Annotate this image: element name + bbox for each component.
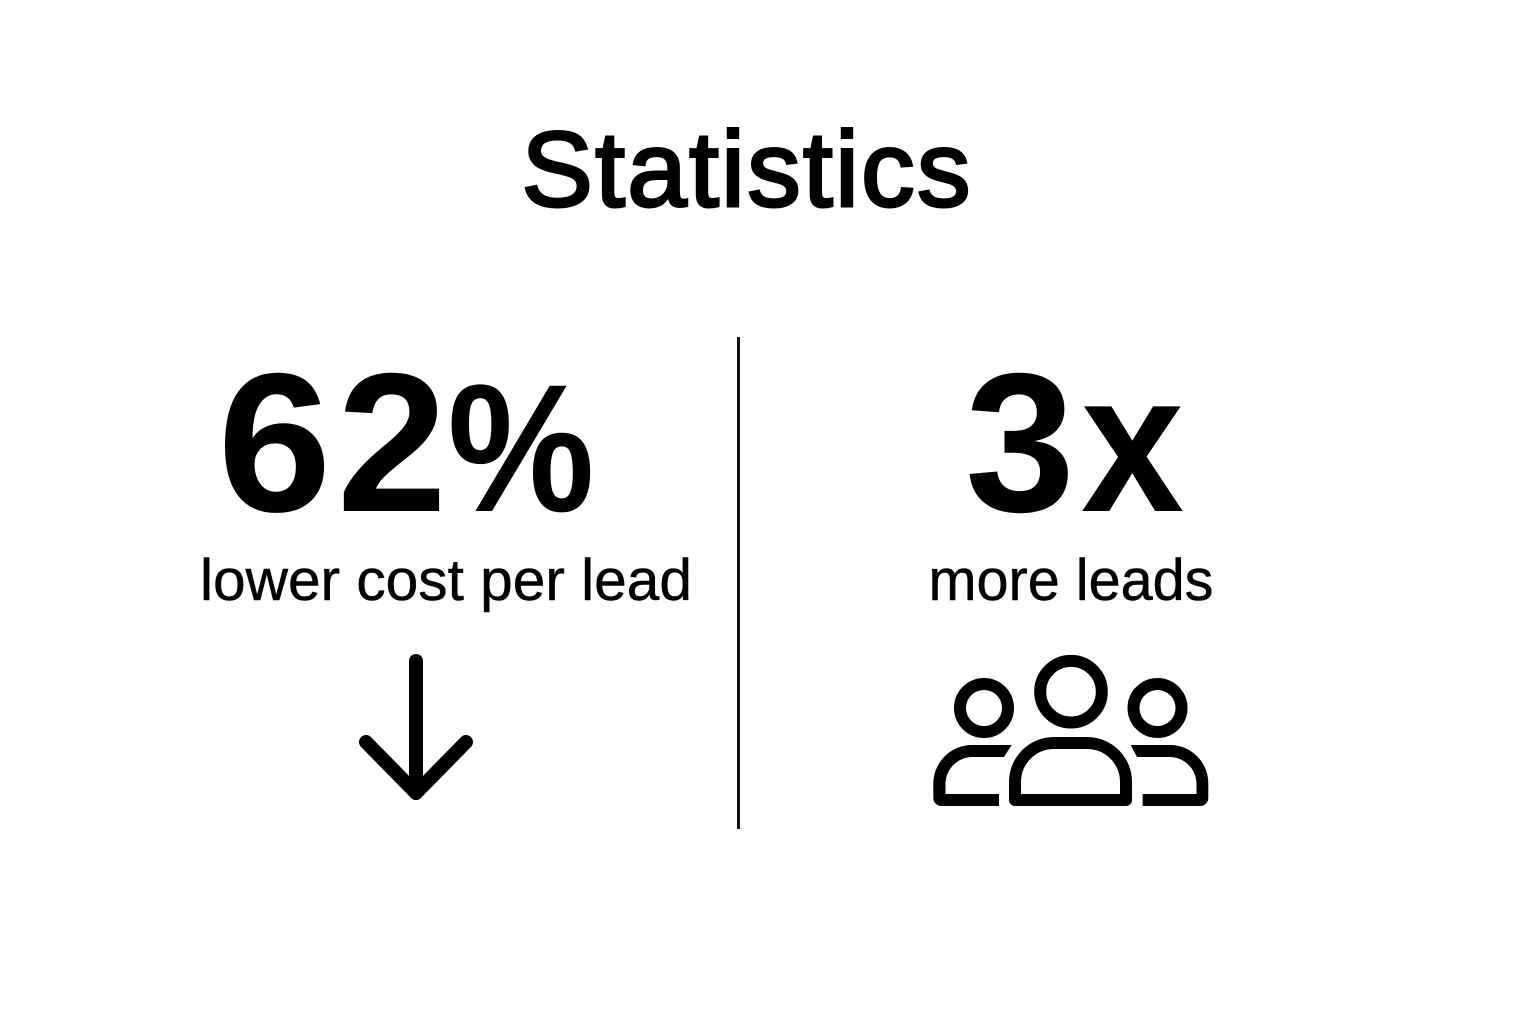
statistic: 3x xyxy=(965,332,1184,553)
panel: lower cost per lead xyxy=(200,332,692,793)
label: lower cost per lead: lower cost per lead xyxy=(200,548,692,613)
statistic: 3x: x xyxy=(1081,332,1184,553)
statistic: 62%: 6 xyxy=(218,332,332,553)
statistic: 62% xyxy=(218,332,594,553)
icon: down arrow xyxy=(366,661,466,793)
divider line xyxy=(737,337,740,829)
icon: group of people xyxy=(933,661,1208,806)
statistic: 62%: 2 xyxy=(337,332,447,553)
statistic: 3x: 3 xyxy=(965,332,1075,553)
label: more leads: more leads xyxy=(928,548,1214,613)
statistic: 62%: % xyxy=(448,346,594,550)
title: Statistics xyxy=(522,109,970,229)
panel: more leads xyxy=(928,332,1214,806)
